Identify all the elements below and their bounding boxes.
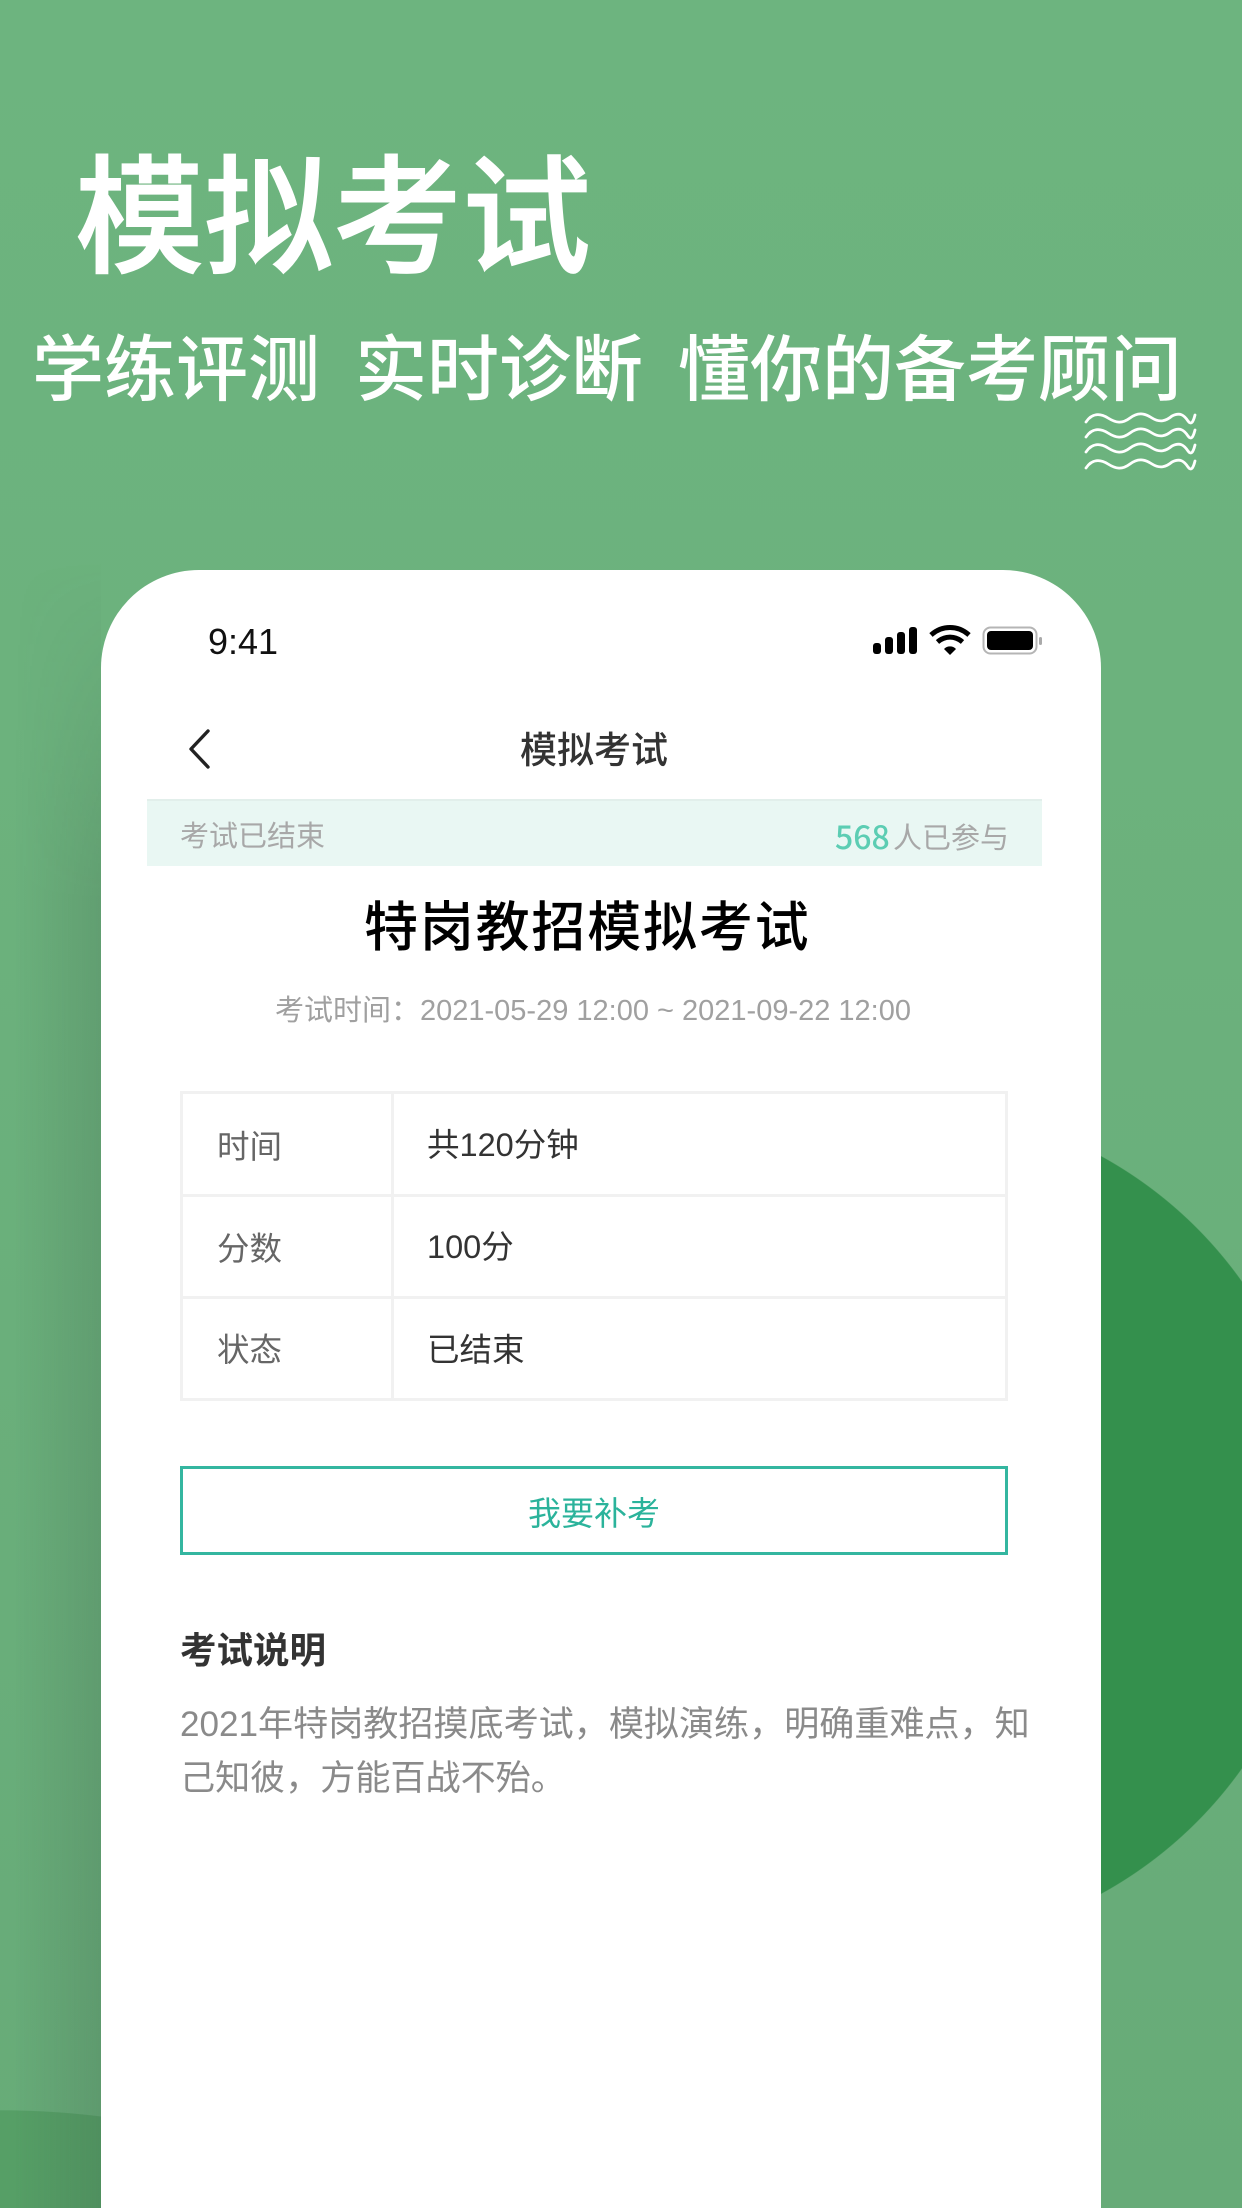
icon: status bar icons: [873, 625, 1042, 655]
subtitle part 3: 懂你的备考顾问: [678, 311, 1182, 416]
icon: wifi: [931, 628, 969, 655]
info table: [180, 1091, 1008, 1401]
retake button: 我要补考: [528, 1487, 660, 1535]
icon: wave lines: [1084, 412, 1196, 470]
row value: score: 100分: [427, 1229, 514, 1265]
left shade beside phone: [50, 698, 101, 2208]
description text: 2021年特岗教招摸底考试，模拟演练，明确重难点，知: [180, 1705, 1030, 1744]
subtitle part 2: 实时诊断: [355, 311, 643, 416]
status banner: [147, 799, 1042, 866]
description heading: 考试说明: [180, 1621, 326, 1674]
row divider 2: [183, 1296, 1005, 1299]
exam time: 考试时间：2021-05-29 12:00 ~ 2021-09-22 12:00: [275, 995, 911, 1027]
bottom-left soft circle: [0, 2100, 120, 2208]
count: 568: [835, 813, 890, 859]
row label: status: 状态: [217, 1324, 282, 1371]
panel: phone screen: [101, 570, 1101, 2208]
icon: battery: [984, 628, 1042, 654]
row value: time: 共120分钟: [427, 1127, 579, 1163]
title: 模拟考试: [75, 114, 591, 301]
row label: score: 分数: [217, 1223, 282, 1270]
row value: status: 已结束: [427, 1324, 525, 1371]
subtitle part 1: 学练评测: [32, 311, 320, 416]
column divider: [391, 1094, 394, 1398]
icon: back chevron: [189, 729, 210, 769]
icon: signal: [873, 627, 917, 654]
row label: time: 时间: [217, 1121, 282, 1168]
row divider 1: [183, 1194, 1005, 1197]
banner participants: [835, 813, 1009, 859]
status time: 9:41: [208, 621, 278, 662]
retake button: [180, 1466, 1008, 1555]
banner status text: 考试已结束: [180, 813, 325, 855]
subtitle: [32, 311, 1182, 416]
exam heading: 特岗教招模拟考试: [364, 883, 810, 962]
dark green circle right: [478, 1104, 1242, 1946]
participants label: 人已参与: [893, 815, 1009, 857]
description text: [180, 1705, 1030, 1798]
description text: 己知彼，方能百战不殆。: [180, 1759, 566, 1798]
nav title: 模拟考试: [520, 720, 668, 774]
